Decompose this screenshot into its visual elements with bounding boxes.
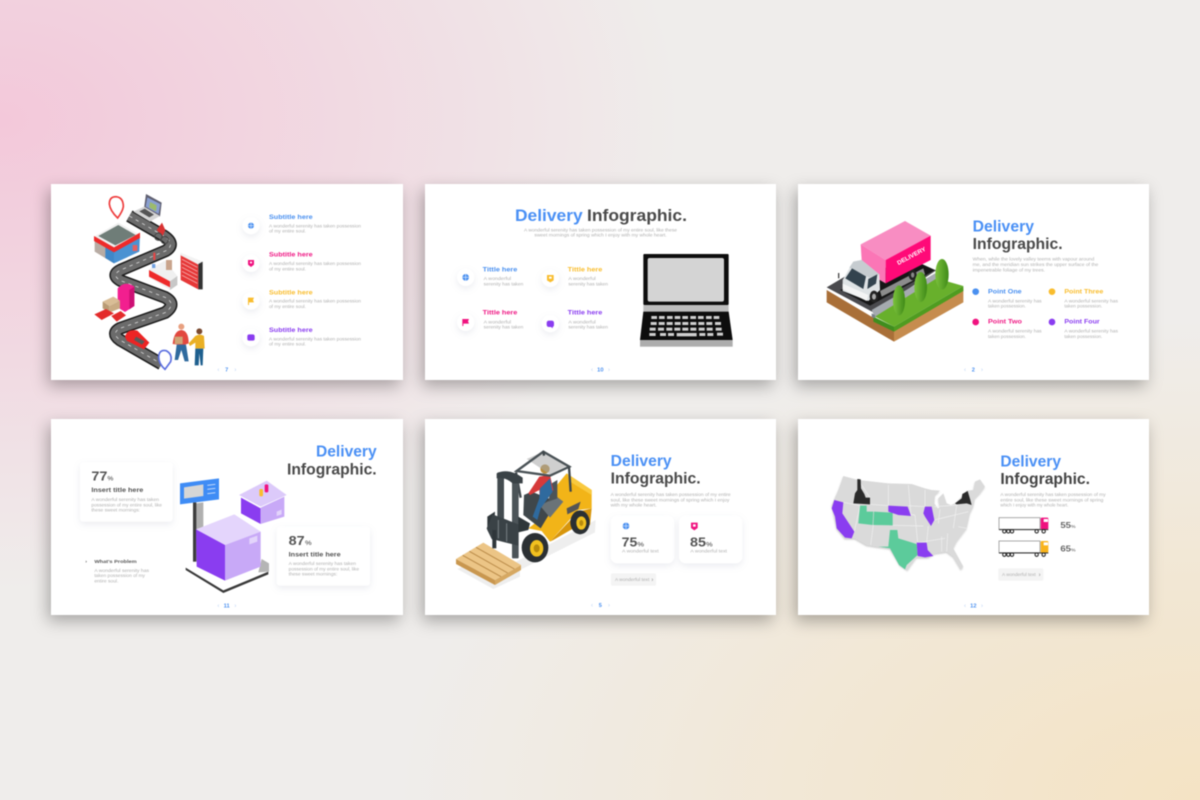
title bbox=[973, 219, 1063, 253]
point four: taken possession. bbox=[1064, 334, 1102, 339]
point one: A wonderful serenity has bbox=[988, 298, 1042, 303]
item: amber: A wonderful bbox=[568, 276, 596, 281]
list item: subtitle purple: A wonderful serenity has taken possession bbox=[269, 336, 361, 341]
list item: subtitle purple: Subtitle here bbox=[269, 327, 313, 334]
stat card: 87% bbox=[277, 527, 370, 586]
list item: subtitle pink: Subtitle here bbox=[269, 252, 313, 259]
problem note bbox=[85, 559, 150, 584]
panel: slide 12 US map bbox=[798, 419, 1149, 615]
point four bbox=[1049, 319, 1119, 339]
problem note: entire soul. bbox=[94, 579, 118, 584]
stat card: 85%: 85 bbox=[690, 535, 707, 550]
list item: subtitle amber bbox=[242, 289, 361, 310]
intro text: impenetrable foliage of my trees. bbox=[973, 267, 1045, 272]
panel: slide 11 parcel scale bbox=[51, 419, 403, 615]
stat card: 87%: % bbox=[305, 541, 313, 547]
intro text bbox=[1000, 492, 1106, 508]
stat card: 87%: Insert title here bbox=[289, 552, 341, 558]
title: Infographic. bbox=[587, 206, 687, 225]
title bbox=[1000, 454, 1090, 488]
stat card: 75%: 75 bbox=[622, 535, 638, 550]
truck stat: 65% bbox=[999, 541, 1076, 556]
stat card: 77%: 77 bbox=[91, 469, 107, 484]
title: Infographic. bbox=[287, 461, 377, 478]
page number: 5 bbox=[599, 603, 602, 609]
title bbox=[515, 206, 687, 225]
item: amber bbox=[542, 267, 608, 287]
list item: subtitle pink: of my entire soul. bbox=[269, 266, 306, 271]
truck stat: 65%: % bbox=[1071, 547, 1076, 552]
problem note: taken possession of my bbox=[94, 573, 146, 578]
item: blue: Tittle here bbox=[483, 267, 518, 274]
intro text bbox=[524, 228, 677, 238]
point two: A wonderful serenity has bbox=[988, 329, 1042, 334]
page number bbox=[964, 367, 983, 374]
intro text: soul, like these sweet mornings of spring which I enjoy bbox=[611, 497, 730, 502]
intro text: me, and the meridian sun strikes the upper surface of the bbox=[973, 262, 1099, 267]
problem note: › bbox=[85, 559, 87, 564]
button: A wonderful text bbox=[1002, 572, 1036, 577]
intro text bbox=[973, 257, 1099, 272]
point two: taken possession. bbox=[988, 334, 1026, 339]
panel: slide 7 road map bbox=[51, 184, 403, 380]
panel: slide 2 truck bbox=[798, 184, 1149, 380]
icon: laptop bbox=[640, 254, 733, 347]
page number: 2 bbox=[972, 368, 975, 374]
page number: 10 bbox=[597, 368, 603, 374]
title: Infographic. bbox=[973, 236, 1063, 253]
stat card: 85%: % bbox=[706, 543, 714, 549]
stat card: 87%: A wonderful serenity has taken bbox=[289, 561, 356, 566]
stat card: 87%: 87 bbox=[289, 533, 305, 548]
item: pink: A wonderful bbox=[484, 319, 511, 324]
item: blue: serenity has taken bbox=[484, 281, 524, 286]
title: Delivery bbox=[1000, 454, 1061, 471]
list item: subtitle amber: of my entire soul. bbox=[269, 304, 306, 309]
stat card: 87%: these sweet mornings: bbox=[289, 572, 337, 577]
title: Delivery bbox=[611, 453, 672, 470]
title: Delivery bbox=[973, 219, 1034, 236]
page number: ‹ bbox=[591, 603, 593, 609]
stat card: 77%: possession of my entire soul, like bbox=[91, 502, 162, 507]
page number: 12 bbox=[970, 604, 976, 610]
point one bbox=[972, 288, 1042, 309]
item: pink bbox=[457, 310, 524, 331]
page number: 11 bbox=[224, 603, 230, 609]
list item: subtitle purple bbox=[242, 327, 361, 347]
stat card: 77%: these sweet mornings: bbox=[91, 508, 140, 513]
list item: subtitle blue: of my entire soul. bbox=[269, 229, 306, 234]
point one: taken possession. bbox=[988, 304, 1026, 309]
page number: › bbox=[608, 367, 610, 373]
page number bbox=[217, 367, 236, 373]
truck stat: 55%: 55 bbox=[1060, 521, 1072, 530]
stat card: 77%: % bbox=[107, 477, 114, 483]
title: Delivery bbox=[316, 444, 377, 461]
item: pink: serenity has taken bbox=[484, 325, 524, 330]
item: pink: Tittle here bbox=[483, 310, 518, 317]
list item: subtitle pink bbox=[242, 252, 361, 272]
button bbox=[998, 568, 1043, 581]
intro text: A wonderful serenity has taken possession of my entire bbox=[611, 492, 731, 497]
stat card: 77% bbox=[80, 462, 173, 522]
page number: › bbox=[608, 603, 610, 609]
illustration: parcel scale bbox=[180, 478, 287, 593]
item: purple: Tittle here bbox=[568, 310, 603, 317]
intro text: with my whole heart. bbox=[611, 503, 657, 508]
intro text: entire soul, like these sweet mornings of spring bbox=[1000, 497, 1104, 502]
intro text: A wonderful serenity has taken possession of my bbox=[1000, 492, 1106, 497]
item: blue: A wonderful bbox=[484, 276, 511, 281]
intro text: A wonderful serenity has taken possession of my entire soul, like these bbox=[524, 228, 677, 233]
page number: ‹ bbox=[964, 367, 966, 373]
button: › bbox=[1039, 572, 1041, 578]
item: purple: A wonderful bbox=[568, 319, 596, 324]
stat card: 75%: A wonderful text bbox=[622, 549, 659, 554]
list item: subtitle pink: A wonderful serenity has taken possession bbox=[269, 261, 361, 266]
page number bbox=[964, 603, 983, 610]
list item: subtitle blue: Subtitle here bbox=[269, 214, 313, 221]
point three: Point Three bbox=[1064, 288, 1104, 295]
problem note: A wonderful serenity has bbox=[94, 568, 150, 573]
title bbox=[611, 453, 701, 487]
illustration: winding road with delivery scenes bbox=[94, 194, 205, 369]
page number: › bbox=[234, 367, 236, 373]
button bbox=[611, 573, 656, 586]
illustration: forklift and pallet bbox=[456, 451, 596, 589]
point one: Point One bbox=[988, 288, 1022, 295]
stat card: 77%: A wonderful serenity has taken bbox=[91, 497, 159, 502]
point three: A wonderful serenity has bbox=[1064, 298, 1119, 303]
intro text bbox=[611, 492, 731, 508]
illustration: delivery truck on isometric ground: DELIVERY bbox=[896, 247, 927, 267]
point four: Point Four bbox=[1064, 319, 1100, 326]
title: Infographic. bbox=[1000, 471, 1090, 488]
point four: A wonderful serenity has bbox=[1064, 329, 1119, 334]
page number bbox=[217, 603, 236, 609]
item: purple: serenity has taken bbox=[568, 325, 608, 330]
stat card: 75%: % bbox=[637, 543, 645, 549]
button: A wonderful text bbox=[615, 577, 650, 582]
truck stat: 55% bbox=[999, 518, 1076, 533]
truck stat: 55%: % bbox=[1071, 524, 1076, 529]
item: blue bbox=[457, 267, 524, 286]
page number: ‹ bbox=[964, 603, 966, 609]
stat card: 75% bbox=[611, 516, 674, 563]
list item: subtitle amber: Subtitle here bbox=[269, 289, 313, 296]
truck stat: 65%: 65 bbox=[1060, 544, 1072, 553]
stat card: 87%: possession of my entire soul, like bbox=[289, 566, 359, 571]
point two bbox=[972, 319, 1042, 339]
point three bbox=[1049, 288, 1119, 309]
page number: › bbox=[234, 603, 236, 609]
list item: subtitle purple: of my entire soul. bbox=[269, 342, 306, 347]
item: purple bbox=[542, 310, 608, 332]
chart: US state map bbox=[832, 476, 985, 570]
intro text: sweet mornings of spring which I enjoy with my whole heart. bbox=[534, 233, 667, 238]
page number: 7 bbox=[225, 367, 228, 373]
intro text: which I enjoy with my whole heart. bbox=[1000, 503, 1068, 508]
point two: Point Two bbox=[988, 319, 1022, 326]
page number bbox=[591, 603, 610, 609]
illustration: delivery truck on isometric ground bbox=[827, 221, 963, 342]
stat card: 85%: A wonderful text bbox=[690, 549, 728, 554]
stat card: 85% bbox=[679, 516, 742, 563]
page number: › bbox=[981, 367, 983, 373]
item: amber: Tittle here bbox=[568, 267, 603, 274]
panel: slide 10 laptop bbox=[425, 184, 776, 380]
page number bbox=[591, 367, 610, 374]
title: Infographic. bbox=[611, 470, 701, 487]
button: › bbox=[651, 577, 653, 583]
problem note: What's Problem bbox=[94, 559, 137, 564]
point three: taken possession. bbox=[1064, 304, 1102, 309]
title: Delivery bbox=[515, 206, 583, 225]
list item: subtitle blue: A wonderful serenity has taken possession bbox=[269, 223, 361, 228]
list item: subtitle amber: A wonderful serenity has taken possession bbox=[269, 299, 361, 304]
page number: › bbox=[981, 603, 983, 609]
item: amber: serenity has taken bbox=[568, 281, 608, 286]
list item: subtitle blue bbox=[242, 214, 361, 234]
page number: ‹ bbox=[217, 603, 219, 609]
panel: slide 5 forklift bbox=[425, 419, 776, 615]
title bbox=[287, 444, 377, 478]
intro text: When, while the lovely valley teems with vapour around bbox=[973, 257, 1095, 262]
stat card: 77%: Insert title here bbox=[91, 488, 144, 494]
page number: ‹ bbox=[591, 367, 593, 373]
page number: ‹ bbox=[217, 367, 219, 373]
